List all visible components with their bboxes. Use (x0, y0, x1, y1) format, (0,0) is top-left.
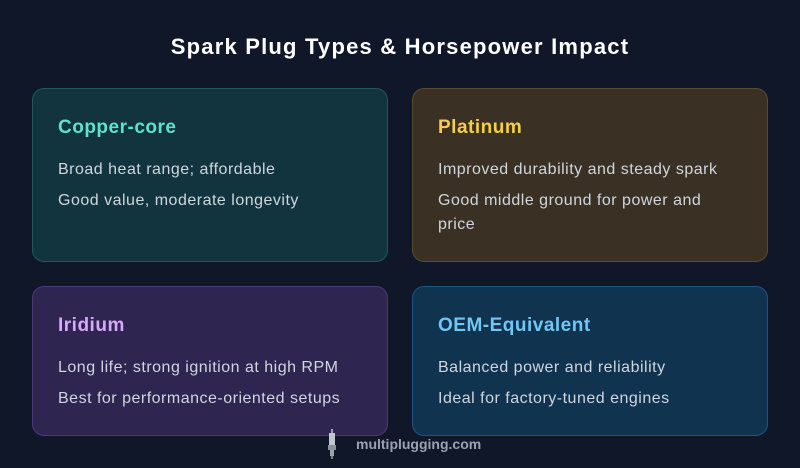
text: copper line 2: Good value, moderate longevity (58, 192, 299, 209)
text: iridium line 1: Long life; strong ignition at high RPM (58, 359, 338, 376)
heading: platinum: Platinum (438, 117, 522, 138)
footer: site: multiplugging.com (356, 436, 481, 452)
heading: iridium: Iridium (58, 315, 125, 336)
panel: oem-equivalent (412, 286, 768, 436)
text: iridium line 2: Best for performance-oriented setups (58, 390, 340, 407)
text: copper line 1: Broad heat range; affordable (58, 161, 275, 178)
panel: copper-core (32, 88, 388, 262)
panel: platinum (412, 88, 768, 262)
text: oem line 2: Ideal for factory-tuned engines (438, 390, 670, 407)
icon: spark plug (328, 429, 336, 459)
text: platinum line 2: Good middle ground for power and price (438, 192, 701, 233)
heading: oem: OEM-Equivalent (438, 315, 591, 336)
text: oem line 1: Balanced power and reliability (438, 359, 666, 376)
title: Spark Plug Types & Horsepower Impact (171, 34, 629, 59)
panel: iridium (32, 286, 388, 436)
heading: copper-core: Copper-core (58, 117, 176, 138)
text: platinum line 1: Improved durability and steady spark (438, 161, 717, 178)
